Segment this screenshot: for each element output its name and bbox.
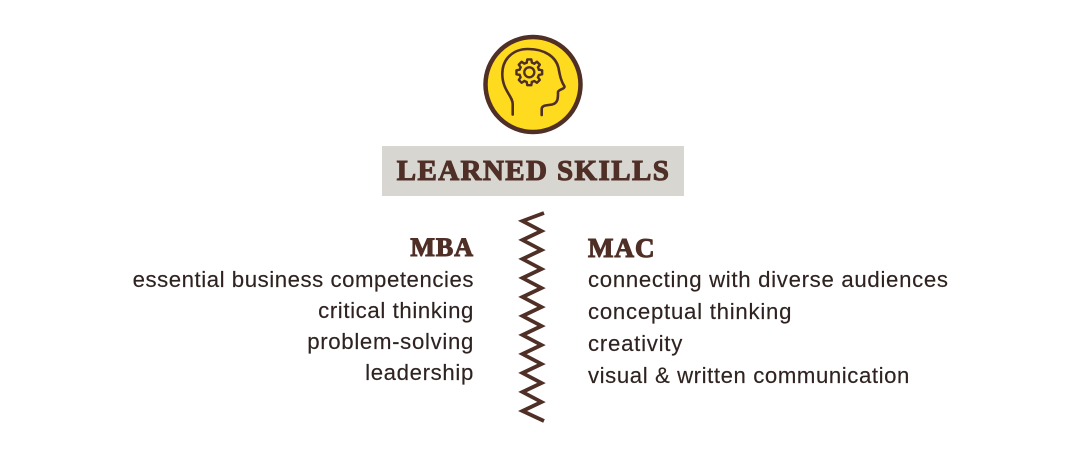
skill list: MAC [588,267,949,388]
skill list: MAC: connecting with diverse audiences [588,267,949,292]
skill list: MAC: creativity [588,331,683,356]
skill list: MAC: visual & written communication [588,363,910,388]
skill list: MBA: critical thinking [318,298,474,323]
title banner: Learned Skills [382,146,684,196]
skill list: MBA: problem-solving [307,329,474,354]
skill list: MBA: leadership [365,360,474,385]
column: MBA skills [133,233,474,385]
column: MAC skills [588,233,949,388]
skill list: MAC: conceptual thinking [588,299,792,324]
heading: MBA: MBA [410,233,474,262]
heading: MAC: MAC [588,233,655,263]
zigzag divider [518,211,546,423]
skill list: MBA [133,267,474,385]
icon: head with gear [483,34,583,134]
heading: Learned Skills: LEARNED SKILLS [397,155,670,187]
skill list: MBA: essential business competencies [133,267,474,292]
